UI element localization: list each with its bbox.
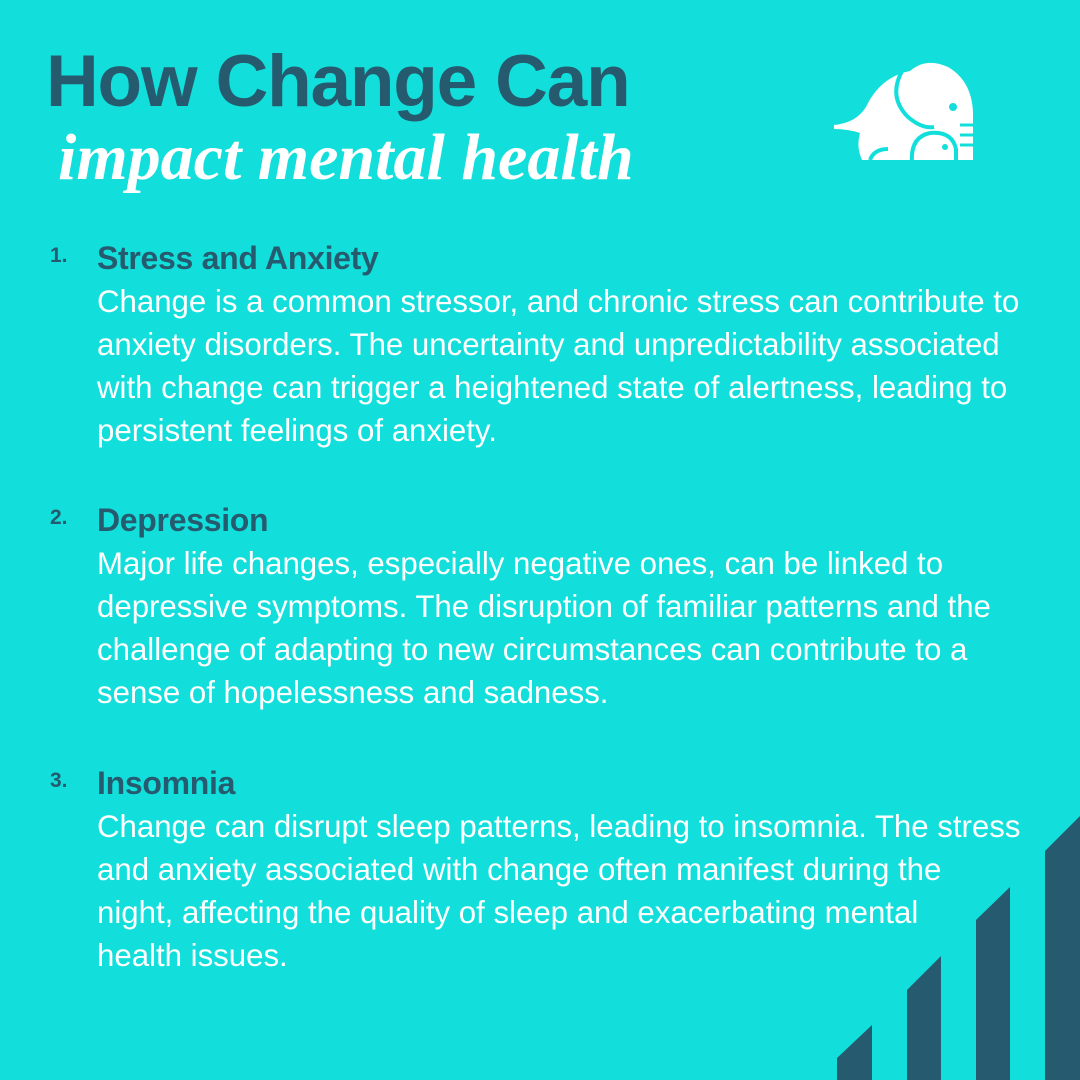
item 3: insomnia: and anxiety associated with change often manifest during the (97, 852, 941, 887)
item 2: depression (50, 502, 991, 710)
item 2: depression: Depression (97, 502, 268, 538)
item 1: stress and anxiety: Stress and Anxiety (97, 240, 379, 276)
item 1: stress and anxiety: 1. (50, 244, 68, 267)
item 1: stress and anxiety: anxiety disorders. The uncertainty and unpredictability associated (97, 327, 1000, 362)
item 1: stress and anxiety: persistent feelings of anxiety. (97, 413, 497, 448)
item 3: insomnia (50, 765, 1020, 973)
icon: elephant logo (834, 62, 973, 160)
item 2: depression: Major life changes, especially negative ones, can be linked to (97, 546, 943, 581)
item 3: insomnia: Insomnia (97, 765, 235, 801)
item 1: stress and anxiety: with change can trigger a heightened state of alertness, leading to (97, 370, 1007, 405)
item 3: insomnia: night, affecting the quality of sleep and exacerbating mental (97, 895, 918, 930)
item 1: stress and anxiety: Change is a common stressor, and chronic stress can contribute to (97, 284, 1019, 319)
subtitle: impact mental health (58, 121, 634, 194)
title: How Change Can (46, 41, 629, 122)
item 2: depression: 2. (50, 506, 68, 529)
item 2: depression: challenge of adapting to new circumstances can contribute to a (97, 632, 967, 667)
item 1: stress and anxiety (50, 240, 1019, 448)
item 3: insomnia: 3. (50, 769, 68, 792)
item 2: depression: sense of hopelessness and sadness. (97, 675, 608, 710)
item 3: insomnia: Change can disrupt sleep patterns, leading to insomnia. The stress (97, 809, 1020, 844)
item 3: insomnia: health issues. (97, 938, 288, 973)
item 2: depression: depressive symptoms. The disruption of familiar patterns and the (97, 589, 991, 624)
